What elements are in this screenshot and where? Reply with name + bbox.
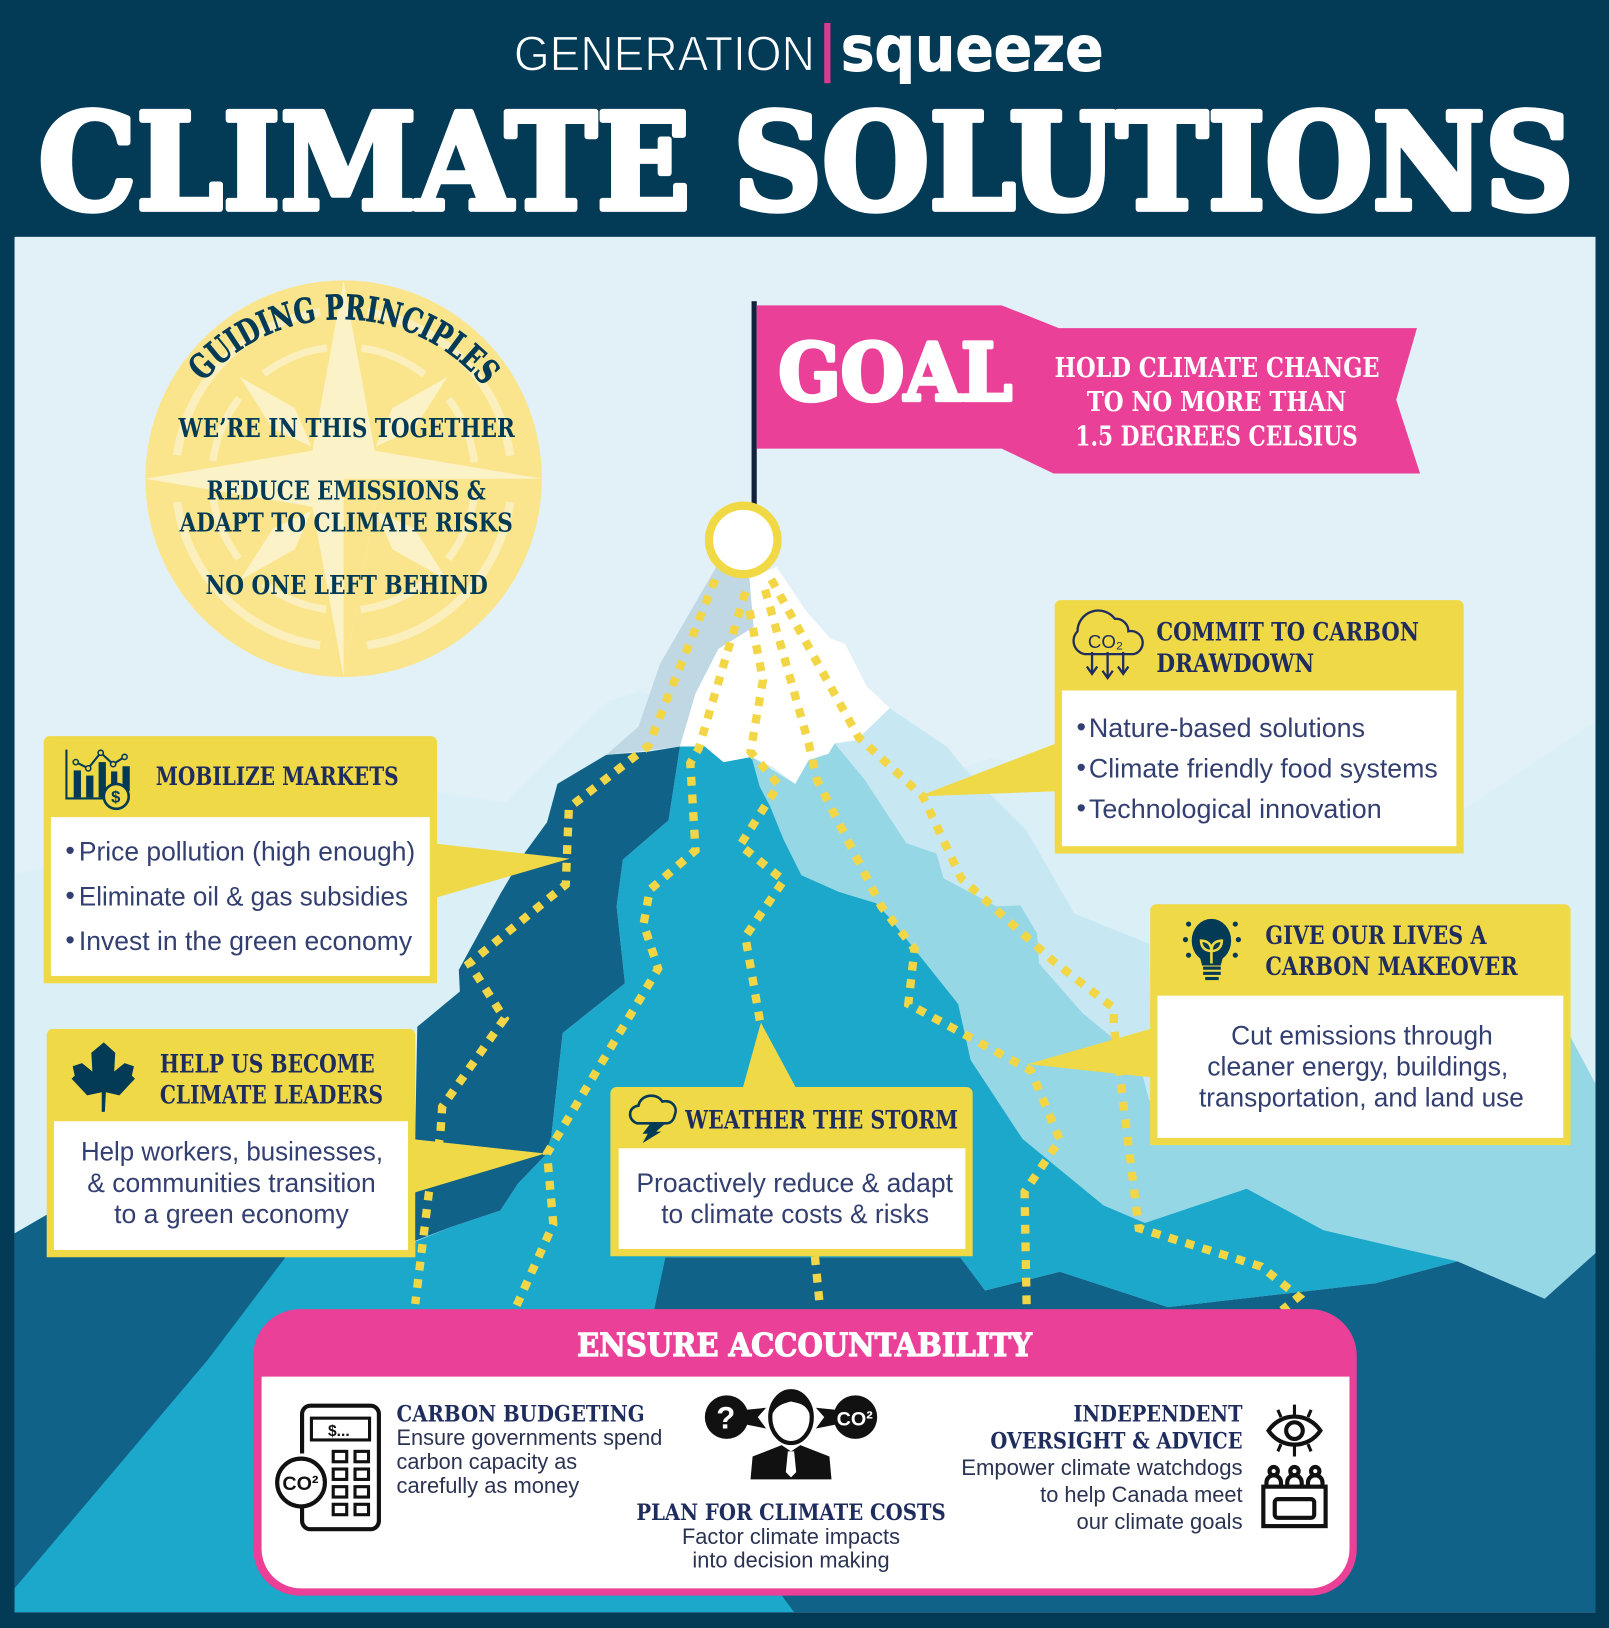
panel: commit to carbon drawdown: • xyxy=(1076,793,1086,823)
goal flag xyxy=(752,301,1420,509)
panel: ensure accountability: to help Canada meet xyxy=(1040,1482,1243,1507)
panel: guiding principles compass xyxy=(145,280,542,677)
panel: give our lives a carbon makeover xyxy=(1028,904,1571,1145)
panel: commit to carbon drawdown: Technological innovation xyxy=(1089,794,1382,824)
panel: ensure accountability: our climate goals xyxy=(1076,1509,1243,1534)
icon: calculator xyxy=(277,1406,379,1529)
panel: ensure accountability: Factor climate impacts xyxy=(682,1524,900,1549)
panel: weather the storm xyxy=(610,1023,973,1256)
panel: commit to carbon drawdown: • xyxy=(1076,712,1086,742)
icon: watchdog eye and council xyxy=(1263,1405,1326,1526)
goal flag: GOAL xyxy=(779,326,1012,419)
panel: guiding principles compass: REDUCE EMISSIONS & xyxy=(207,476,486,506)
icon: light bulb xyxy=(1183,919,1241,980)
goal flag: HOLD CLIMATE CHANGE xyxy=(1055,353,1380,384)
logo: generation squeeze: squeeze xyxy=(841,13,1103,86)
icon: CO2 cloud xyxy=(1074,611,1143,678)
panel: ensure accountability: Empower climate watchdogs xyxy=(961,1455,1243,1480)
panel: weather the storm: Proactively reduce & adapt xyxy=(636,1168,953,1198)
logo: generation squeeze xyxy=(514,13,1103,86)
logo: generation squeeze: GENERATION xyxy=(514,28,815,82)
panel: ensure accountability: OVERSIGHT & ADVICE xyxy=(990,1428,1243,1454)
icon: person weighing costs xyxy=(705,1391,877,1479)
panel: guiding principles compass: ADAPT TO CLIMATE RISKS xyxy=(179,509,513,539)
panel: commit to carbon drawdown: DRAWDOWN xyxy=(1156,649,1314,678)
panel: ensure accountability: carefully as money xyxy=(397,1473,579,1498)
panel: mobilize markets: • xyxy=(65,880,75,910)
dotted ascent routes xyxy=(415,579,1299,1310)
panel: give our lives a carbon makeover: Cut emissions through xyxy=(1231,1020,1493,1050)
panel: ensure accountability: INDEPENDENT xyxy=(1073,1401,1243,1427)
panel: ensure accountability: CARBON BUDGETING xyxy=(397,1401,645,1427)
panel: give our lives a carbon makeover: transportation, and land use xyxy=(1199,1083,1524,1113)
icon: CO2 cloud: CO₂ xyxy=(1088,631,1123,652)
panel: help us become climate leaders: HELP US BECOME xyxy=(160,1049,375,1078)
panel: guiding principles compass: NO ONE LEFT BEHIND xyxy=(206,571,488,601)
panel: ensure accountability: into decision making xyxy=(692,1548,890,1573)
panel: help us become climate leaders: & communities transition xyxy=(87,1168,376,1198)
panel: mobilize markets: Eliminate oil & gas subsidies xyxy=(79,881,408,911)
goal flag: 1.5 DEGREES CELSIUS xyxy=(1075,421,1358,452)
panel: help us become climate leaders: CLIMATE LEADERS xyxy=(160,1081,383,1110)
panel: help us become climate leaders: to a green economy xyxy=(114,1199,349,1229)
icon: market chart xyxy=(66,750,130,809)
icon: calculator: $... xyxy=(328,1423,350,1440)
icon: person weighing costs: ? xyxy=(716,1401,735,1436)
panel: commit to carbon drawdown: COMMIT TO CARBON xyxy=(1156,618,1419,647)
panel: guiding principles compass: GUIDING PRINCIPLES xyxy=(190,294,500,384)
compass rose xyxy=(145,280,542,677)
icon: calculator: CO² xyxy=(282,1473,319,1495)
panel: mobilize markets: Invest in the green economy xyxy=(79,926,413,956)
panel: ensure accountability: carbon capacity as xyxy=(397,1449,577,1474)
panel: weather the storm: to climate costs & risks xyxy=(661,1199,929,1229)
panel: give our lives a carbon makeover: CARBON MAKEOVER xyxy=(1265,952,1518,981)
icon: market chart: $ xyxy=(111,788,120,807)
panel: mobilize markets: • xyxy=(65,836,75,866)
panel: mobilize markets: • xyxy=(65,925,75,955)
panel: help us become climate leaders: Help workers, businesses, xyxy=(81,1137,383,1167)
summit marker xyxy=(709,506,778,574)
icon: person weighing costs: CO² xyxy=(837,1408,873,1430)
panel: mobilize markets xyxy=(44,736,570,983)
panel: commit to carbon drawdown: Climate friendly food systems xyxy=(1089,754,1438,784)
panel: help us become climate leaders xyxy=(47,1029,545,1257)
mountain range illustration xyxy=(15,567,1596,1612)
icon: storm cloud xyxy=(630,1096,676,1143)
panel: commit to carbon drawdown xyxy=(919,600,1464,853)
panel: guiding principles compass: WE’RE IN THIS TOGETHER xyxy=(178,414,515,444)
panel: ensure accountability: PLAN FOR CLIMATE COSTS xyxy=(636,1500,946,1526)
panel: give our lives a carbon makeover: GIVE OUR LIVES A xyxy=(1265,921,1487,950)
panel: ensure accountability xyxy=(253,1309,1357,1596)
panel: give our lives a carbon makeover: cleaner energy, buildings, xyxy=(1207,1052,1508,1082)
panel: commit to carbon drawdown: Nature-based solutions xyxy=(1089,713,1365,743)
panel: commit to carbon drawdown: • xyxy=(1076,753,1086,783)
icon: maple leaf xyxy=(72,1042,135,1112)
panel: weather the storm: WEATHER THE STORM xyxy=(684,1106,958,1135)
goal flag: TO NO MORE THAN xyxy=(1087,387,1346,418)
panel: mobilize markets: MOBILIZE MARKETS xyxy=(156,762,399,791)
panel: ensure accountability: ENSURE ACCOUNTABILITY xyxy=(577,1326,1033,1364)
panel: ensure accountability: Ensure governments spend xyxy=(397,1425,662,1450)
panel: mobilize markets: Price pollution (high enough) xyxy=(79,837,415,867)
